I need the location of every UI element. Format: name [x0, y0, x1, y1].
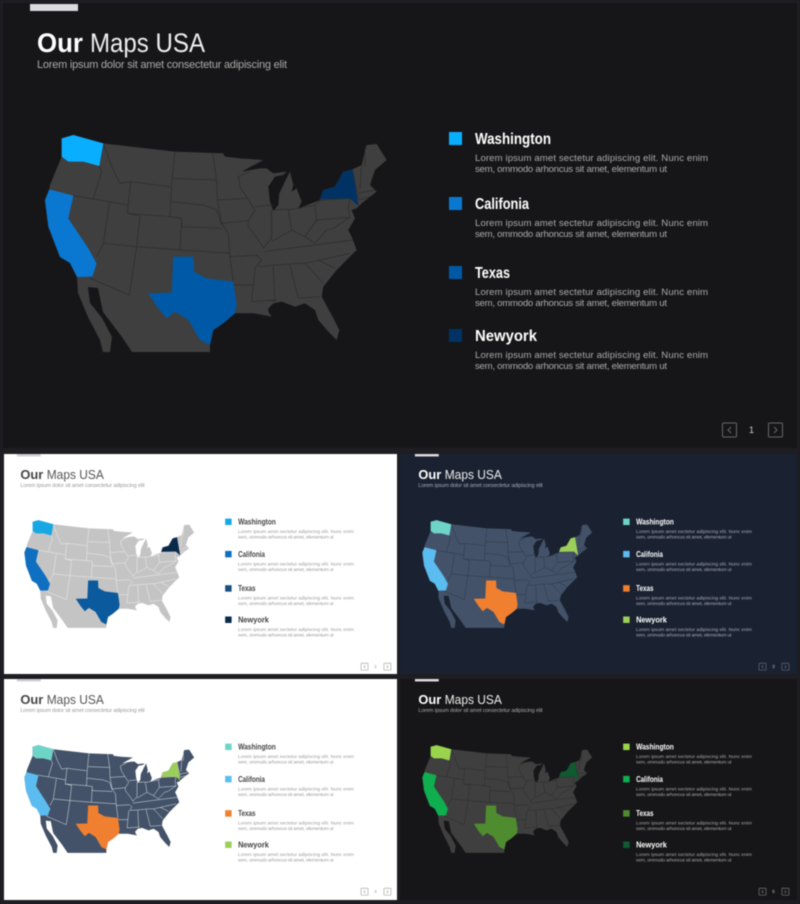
legend: New York: Lorem ipsum amet sectetur adipiscing elit. Nunc enim — [238, 627, 354, 633]
subtitle: Lorem ipsum dolor sit amet consectetur adipiscing elit — [418, 708, 543, 714]
state: California — [24, 772, 50, 816]
state: California — [24, 547, 50, 591]
legend: Washington: Lorem ipsum amet sectetur adipiscing elit. Nunc enim — [475, 153, 708, 164]
legend: New York — [449, 328, 708, 372]
legend: California: sem, ommodo arhoncus sit amet, elementum ut — [238, 792, 334, 798]
map: USA — [24, 520, 194, 628]
title: Our — [37, 28, 83, 58]
legend: Washington: Washington — [238, 743, 276, 752]
title: Maps USA — [47, 692, 104, 707]
pagination: 4 — [374, 889, 377, 894]
state: Washington — [62, 135, 103, 166]
state: Washington — [33, 745, 53, 760]
legend: New York — [225, 615, 354, 638]
legend: Washington: Washington — [636, 743, 674, 752]
legend: Texas — [225, 584, 354, 607]
subtitle: Lorem ipsum dolor sit amet consectetur adipiscing elit — [37, 59, 287, 71]
legend: New York: Newyork — [475, 328, 537, 345]
panel: main dark slide — [3, 3, 797, 448]
panel: white slide, slate map — [4, 679, 397, 900]
legend: Washington: Washington — [238, 518, 276, 527]
legend: Washington — [225, 518, 354, 540]
title: Our — [20, 467, 43, 482]
pagination — [361, 663, 391, 670]
slide tab — [17, 454, 41, 456]
legend: California: sem, ommodo arhoncus sit amet, elementum ut — [238, 567, 334, 573]
legend: Texas: Lorem ipsum amet sectetur adipiscing elit. Nunc enim — [475, 287, 708, 298]
legend: New York: sem, ommodo arhoncus sit amet, elementum ut — [636, 632, 732, 638]
state: New York — [320, 169, 358, 206]
panel: dark slide, green states — [400, 679, 797, 900]
title: Our — [418, 467, 441, 482]
legend: Texas — [623, 809, 752, 832]
legend: Texas: Texas — [238, 584, 256, 593]
legend: California — [623, 775, 752, 798]
legend: Washington — [623, 518, 752, 540]
legend: California: Lorem ipsum amet sectetur adipiscing elit. Nunc enim — [636, 786, 752, 792]
map: USA — [422, 745, 592, 853]
legend: Texas: sem, ommodo arhoncus sit amet, elementum ut — [238, 601, 334, 607]
title — [20, 692, 104, 707]
slide tab — [30, 4, 78, 11]
legend: Texas: Texas — [636, 584, 654, 593]
title — [37, 28, 205, 58]
legend: California: Lorem ipsum amet sectetur adipiscing elit. Nunc enim — [238, 561, 354, 567]
legend: Texas: sem, ommodo arhoncus sit amet, elementum ut — [636, 826, 732, 832]
title: Our — [20, 692, 43, 707]
state: California — [45, 189, 97, 277]
legend: Texas: Lorem ipsum amet sectetur adipiscing elit. Nunc enim — [238, 821, 354, 827]
legend: Washington: Lorem ipsum amet sectetur adipiscing elit. Nunc enim — [238, 529, 354, 535]
legend: California: Califonia — [636, 775, 663, 784]
pagination — [759, 888, 789, 895]
legend: New York: sem, ommodo arhoncus sit amet, elementum ut — [238, 857, 334, 863]
pagination: 3 — [772, 664, 775, 669]
legend: California: Califonia — [475, 196, 529, 213]
legend: Washington: sem, ommodo arhoncus sit amet, elementum ut — [238, 534, 334, 540]
map: USA — [422, 520, 592, 628]
legend: Washington: Washington — [475, 131, 551, 148]
legend: Washington: sem, ommodo arhoncus sit amet, elementum ut — [636, 759, 732, 765]
legend: New York — [623, 615, 752, 638]
legend: New York: Newyork — [238, 615, 269, 624]
state: Washington — [431, 520, 451, 535]
state: Texas — [76, 581, 120, 624]
legend: Texas: Lorem ipsum amet sectetur adipiscing elit. Nunc enim — [636, 596, 752, 602]
legend: New York: Newyork — [636, 615, 667, 624]
legend: Washington: sem, ommodo arhoncus sit amet, elementum ut — [475, 164, 667, 175]
title: Maps USA — [90, 28, 205, 58]
pagination: 2 — [374, 664, 377, 669]
legend: California: Califonia — [636, 550, 663, 559]
legend: Washington: sem, ommodo arhoncus sit amet, elementum ut — [238, 759, 334, 765]
legend: Texas: sem, ommodo arhoncus sit amet, elementum ut — [636, 601, 732, 607]
slide tab — [17, 679, 41, 681]
state: New York — [161, 762, 180, 780]
legend: Texas — [623, 584, 752, 607]
legend: Texas: sem, ommodo arhoncus sit amet, elementum ut — [475, 298, 667, 309]
title — [20, 467, 104, 482]
pagination — [361, 888, 391, 895]
panel: white slide, blue states — [4, 454, 397, 674]
pagination: 5 — [772, 889, 775, 894]
pagination — [759, 663, 789, 670]
legend: California: sem, ommodo arhoncus sit amet, elementum ut — [636, 567, 732, 573]
state: New York — [559, 762, 578, 780]
legend: Texas: Lorem ipsum amet sectetur adipiscing elit. Nunc enim — [636, 821, 752, 827]
state: Washington — [431, 745, 451, 760]
legend: Texas: Texas — [475, 265, 510, 282]
legend: California: Califonia — [238, 550, 265, 559]
legend: Washington — [225, 743, 354, 765]
legend: Texas: sem, ommodo arhoncus sit amet, elementum ut — [238, 826, 334, 832]
legend: New York: sem, ommodo arhoncus sit amet, elementum ut — [238, 632, 334, 638]
subtitle: Lorem ipsum dolor sit amet consectetur adipiscing elit — [20, 483, 145, 489]
title — [418, 467, 502, 482]
legend: Washington: sem, ommodo arhoncus sit amet, elementum ut — [636, 534, 732, 540]
legend: California: Lorem ipsum amet sectetur adipiscing elit. Nunc enim — [475, 218, 708, 229]
legend: California: Lorem ipsum amet sectetur adipiscing elit. Nunc enim — [636, 561, 752, 567]
legend: Washington: Lorem ipsum amet sectetur adipiscing elit. Nunc enim — [636, 754, 752, 760]
title — [418, 692, 502, 707]
legend: California — [623, 550, 752, 573]
slide tab — [415, 679, 439, 681]
state: Texas — [148, 257, 237, 345]
slide tab — [415, 454, 439, 456]
legend: New York: sem, ommodo arhoncus sit amet, elementum ut — [475, 361, 667, 372]
map: USA — [24, 745, 194, 853]
legend: New York: Newyork — [238, 840, 269, 849]
state: Texas — [474, 581, 518, 624]
state: New York — [161, 537, 180, 555]
legend: Washington: Lorem ipsum amet sectetur adipiscing elit. Nunc enim — [238, 754, 354, 760]
legend: California — [449, 196, 708, 240]
state: Texas — [474, 806, 518, 849]
legend: New York: Lorem ipsum amet sectetur adipiscing elit. Nunc enim — [636, 627, 752, 633]
legend: New York — [225, 840, 354, 863]
state: California — [422, 772, 448, 816]
legend: Texas: Lorem ipsum amet sectetur adipiscing elit. Nunc enim — [238, 596, 354, 602]
legend: New York — [623, 840, 752, 863]
title: Maps USA — [445, 692, 502, 707]
title: Maps USA — [445, 467, 502, 482]
legend: California: sem, ommodo arhoncus sit amet, elementum ut — [475, 229, 667, 240]
legend: New York: Newyork — [636, 840, 667, 849]
legend: Washington — [623, 743, 752, 765]
panel: navy slide, colourful states — [400, 454, 797, 674]
legend: Texas: Texas — [238, 809, 256, 818]
legend: California: sem, ommodo arhoncus sit amet, elementum ut — [636, 792, 732, 798]
legend: California: Califonia — [238, 775, 265, 784]
title: Maps USA — [47, 467, 104, 482]
state: Washington — [33, 520, 53, 535]
subtitle: Lorem ipsum dolor sit amet consectetur adipiscing elit — [418, 483, 543, 489]
legend: New York: Lorem ipsum amet sectetur adipiscing elit. Nunc enim — [238, 852, 354, 858]
legend: Washington: Lorem ipsum amet sectetur adipiscing elit. Nunc enim — [636, 529, 752, 535]
title: Our — [418, 692, 441, 707]
map: USA — [45, 135, 387, 352]
subtitle: Lorem ipsum dolor sit amet consectetur adipiscing elit — [20, 708, 145, 714]
pagination: 1 — [749, 425, 754, 435]
legend: California: Lorem ipsum amet sectetur adipiscing elit. Nunc enim — [238, 786, 354, 792]
legend: Washington — [449, 131, 708, 175]
state: Texas — [76, 806, 120, 849]
legend: New York: Lorem ipsum amet sectetur adipiscing elit. Nunc enim — [475, 350, 708, 361]
legend: California — [225, 775, 354, 798]
legend: Washington: Washington — [636, 518, 674, 527]
legend: Texas — [225, 809, 354, 832]
legend: New York: Lorem ipsum amet sectetur adipiscing elit. Nunc enim — [636, 852, 752, 858]
legend: Texas — [449, 265, 708, 309]
legend: California — [225, 550, 354, 573]
state: California — [422, 547, 448, 591]
pagination — [722, 423, 782, 437]
legend: Texas: Texas — [636, 809, 654, 818]
legend: New York: sem, ommodo arhoncus sit amet, elementum ut — [636, 857, 732, 863]
state: New York — [559, 537, 578, 555]
